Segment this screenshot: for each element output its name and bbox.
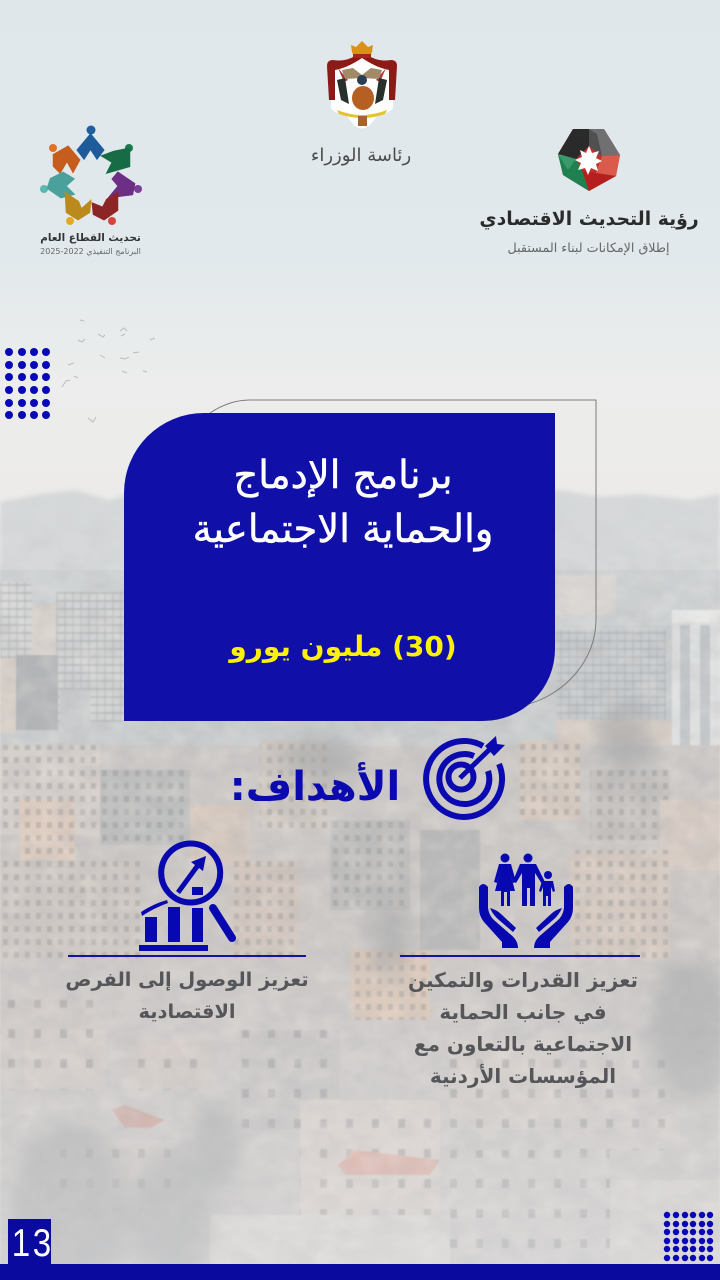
logo: public sector modernisation ring	[40, 126, 142, 225]
text: objective one	[408, 968, 638, 1088]
logo text: public sector title: تحديث القطاع العام	[40, 232, 141, 244]
dot grid: bottom right	[664, 1212, 714, 1262]
logo: government coat of arms	[327, 41, 397, 128]
logo: economic modernisation vision polygon	[558, 129, 620, 191]
icon: chart with magnifier	[139, 840, 236, 951]
icon: target with arrow	[423, 736, 506, 820]
dot grid: top left	[5, 348, 50, 419]
text: objective two	[65, 968, 309, 1023]
programme title	[193, 453, 493, 552]
text: objective one: في جانب الحماية	[439, 1000, 607, 1024]
bottom bar	[0, 1264, 720, 1280]
text: objective one: المؤسسات الأردنية	[430, 1064, 616, 1088]
logo text: vision tagline: إطلاق الإمكانات لبناء المستقبل	[508, 240, 670, 255]
background: amman cityscape	[0, 320, 720, 1264]
programme title: برنامج الإدماج	[233, 453, 453, 498]
text: objective one: الاجتماعية بالتعاون مع	[414, 1032, 632, 1056]
budget amount: (30) مليون يورو	[229, 630, 457, 663]
logo text: vision title: رؤية التحديث الاقتصادي	[479, 209, 699, 230]
divider: right column	[400, 955, 640, 957]
panel outline	[210, 400, 596, 704]
logo: prime ministry calligraphy: رئاسة الوزراء	[311, 145, 411, 166]
heading: objectives: الأهداف:	[230, 764, 400, 810]
logo text: programme years: البرنامج التنفيذي 2022-2025	[40, 247, 141, 256]
panel: programme title and budget	[124, 413, 555, 721]
icon: family in caring hands	[479, 854, 573, 948]
text: objective two: الاقتصادية	[138, 1000, 236, 1023]
text: objective two: تعزيز الوصول إلى الفرص	[65, 968, 309, 991]
programme title: والحماية الاجتماعية	[193, 507, 493, 552]
divider: left column	[68, 955, 306, 957]
text: objective one: تعزيز القدرات والتمكين	[408, 968, 638, 992]
